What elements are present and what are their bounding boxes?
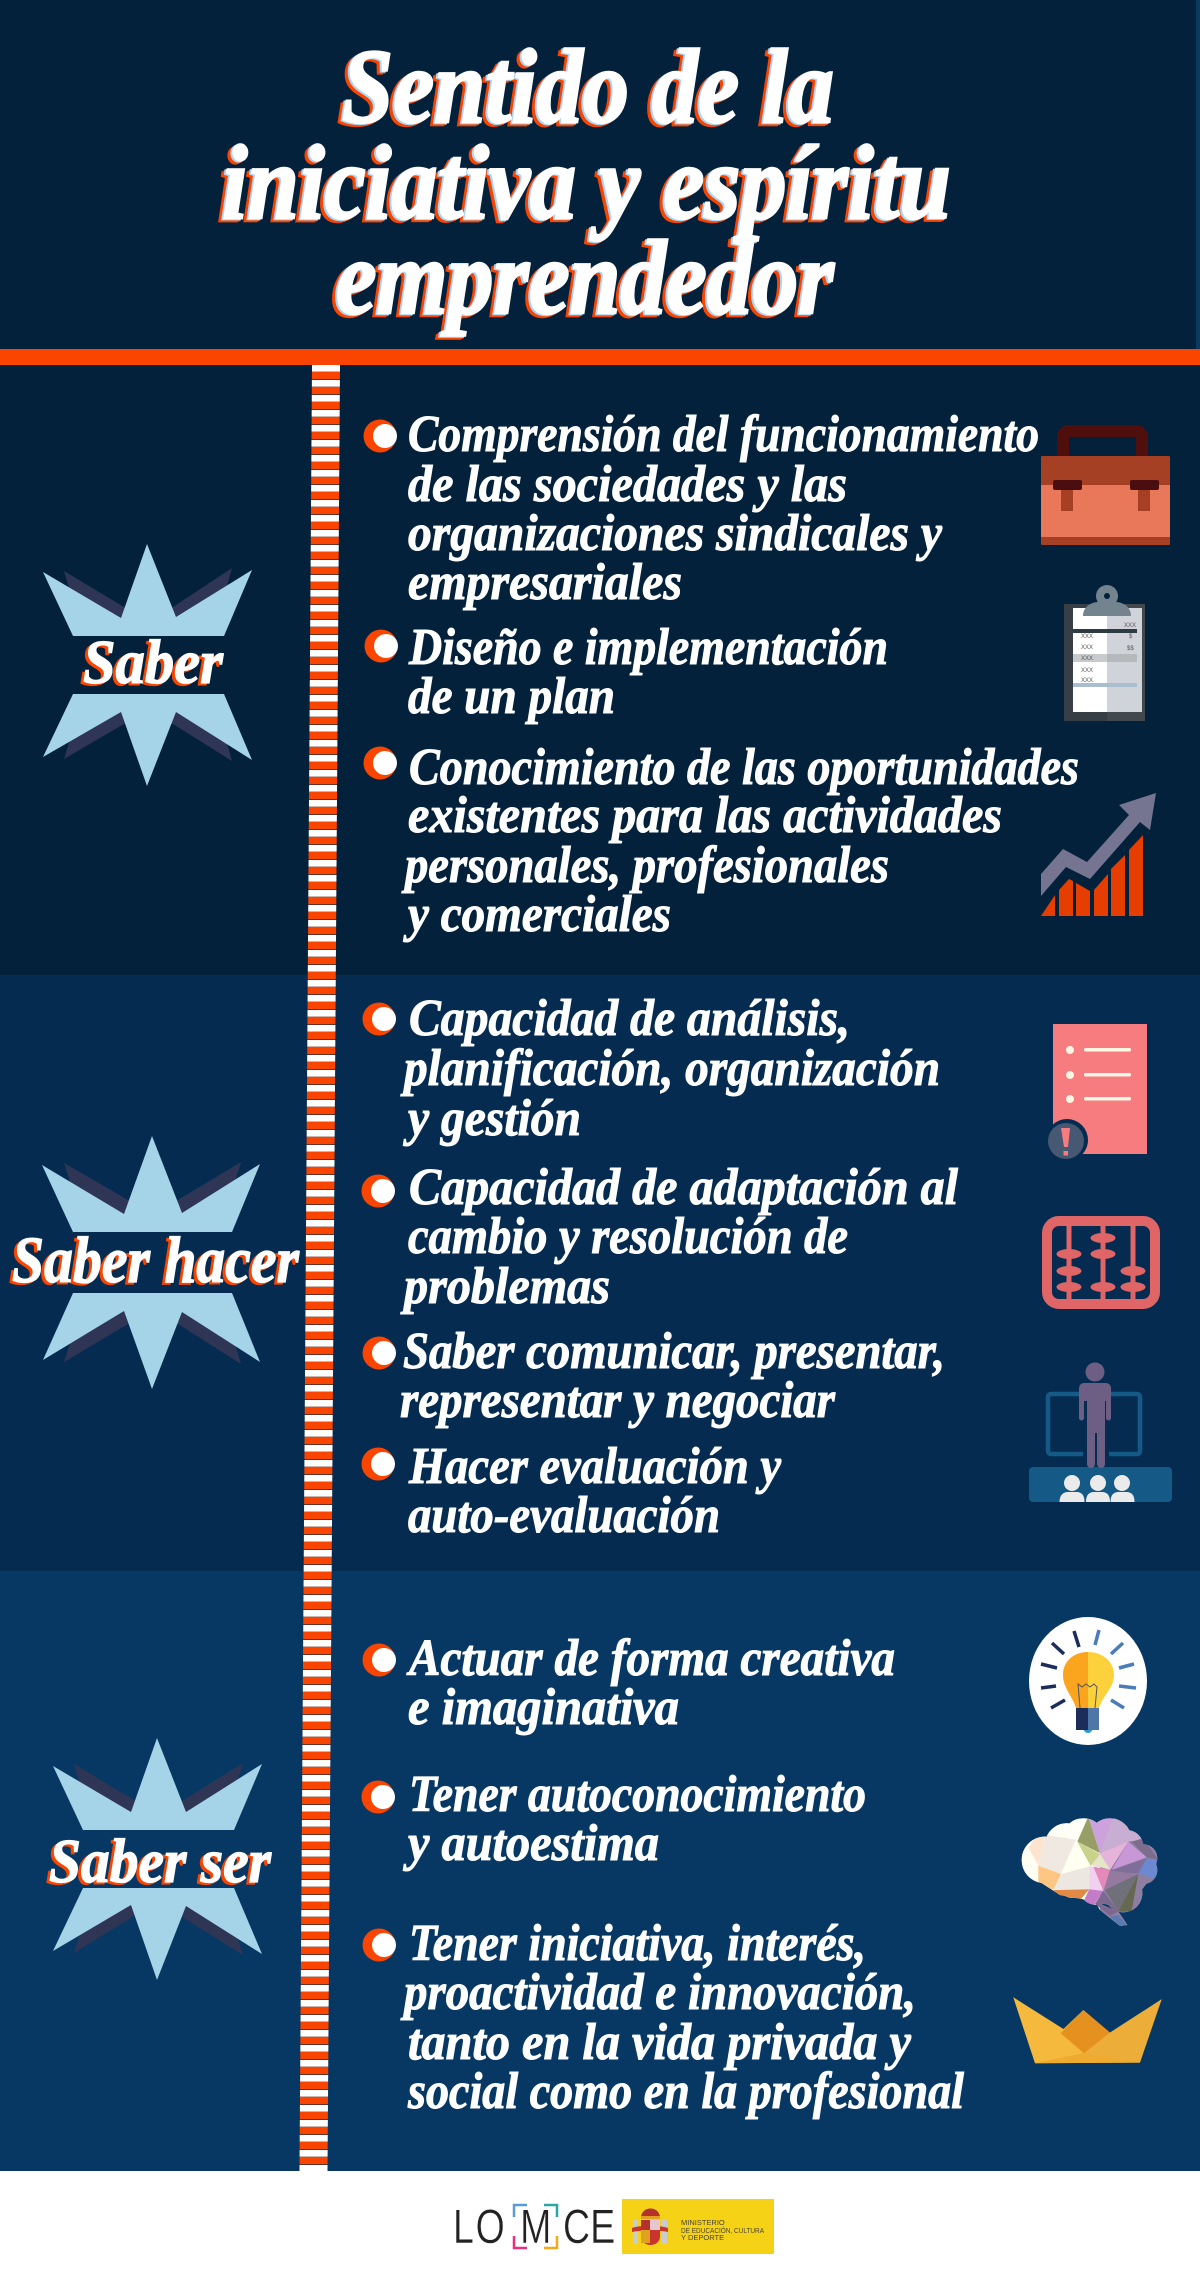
- list item: Diseño: [364, 619, 888, 725]
- list item: Comprensión: Comprensión del funcionamiento: [408, 406, 1039, 463]
- list item: Saber comunicar: representar y negociar: [400, 1372, 836, 1429]
- list item: iniciativa: tanto en la vida privada y: [408, 2014, 912, 2071]
- icon: abacus: [1047, 1221, 1155, 1304]
- title: emprendedor: [336, 219, 835, 336]
- icon: clipboard: XXX: [1124, 623, 1136, 629]
- star badge: Saber: Saber: [83, 629, 224, 697]
- footer: ministry badge: [622, 2199, 774, 2254]
- list item: Capacidad de análisis: planificación, organización: [400, 1040, 940, 1097]
- list item: Capacidad de análisis: y gestión: [403, 1090, 581, 1147]
- list item: autoconocimiento: [362, 1766, 866, 1872]
- list item: Comprensión: [364, 406, 1039, 611]
- list item: Capacidad de adaptación: [362, 1159, 959, 1315]
- icon: briefcase: [1041, 431, 1170, 545]
- icon: clipboard: $$: [1127, 646, 1134, 652]
- section background: Saber: [0, 365, 1200, 975]
- title: [222, 28, 951, 336]
- star badge: Saber hacer: Saber hacer: [12, 1224, 300, 1297]
- list item: Capacidad de adaptación: problemas: [400, 1258, 610, 1315]
- list item: Comprensión: empresariales: [408, 554, 682, 611]
- list item: iniciativa: social como en la profesional: [407, 2063, 964, 2120]
- list item: Hacer evaluación: [362, 1438, 782, 1544]
- icon: low-poly brain: [1022, 1818, 1158, 1926]
- section background: Saber ser: [0, 1571, 1200, 2171]
- orange header bar: [0, 349, 1200, 365]
- footer: ministry badge: DE EDUCACIÓN, CULTURA: [681, 2226, 764, 2235]
- icon: clipboard: XXX: [1081, 668, 1093, 674]
- star badge: Saber ser: [49, 1738, 272, 1980]
- list item: Conocimiento: y comerciales: [403, 886, 671, 943]
- list item: Actuar: Actuar de forma creativa: [406, 1630, 895, 1687]
- section background: header: [0, 0, 1200, 349]
- section background: footer: [0, 2171, 1200, 2292]
- list item: Hacer evaluación: auto-evaluación: [408, 1487, 720, 1544]
- list item: iniciativa: [362, 1915, 964, 2120]
- section background: Saber hacer: [0, 975, 1200, 1571]
- icon: clipboard: $: [1129, 634, 1133, 640]
- list item: Capacidad de adaptación: Capacidad de adaptación al: [409, 1159, 959, 1216]
- list item: Saber comunicar: Saber comunicar, presentar,: [403, 1323, 945, 1380]
- striped vertical timeline: [300, 365, 340, 2171]
- footer: ministry badge: MINISTERIO: [681, 2218, 725, 2227]
- list item: Conocimiento: Conocimiento de las oportunidades: [409, 739, 1079, 796]
- footer: LOMCE logo: LOMCE: [453, 2201, 615, 2254]
- icon: clipboard: XXX: [1081, 634, 1093, 640]
- icon: paper crown: [1013, 1997, 1162, 2063]
- list item: Diseño: de un plan: [408, 668, 615, 725]
- star badge: Saber ser: Saber ser: [49, 1828, 272, 1896]
- list item: Saber comunicar: [362, 1323, 945, 1429]
- list item: Capacidad de adaptación: cambio y resolución de: [408, 1208, 848, 1265]
- list item: autoconocimiento: Tener autoconocimiento: [409, 1766, 866, 1823]
- list item: Conocimiento: personales, profesionales: [401, 837, 889, 894]
- list item: Conocimiento: existentes para las actividades: [408, 787, 1002, 844]
- icon: presenter and audience: [1029, 1362, 1172, 1502]
- list item: Hacer evaluación: Hacer evaluación y: [408, 1438, 782, 1495]
- list item: autoconocimiento: y autoestima: [402, 1815, 659, 1872]
- list item: iniciativa: proactividad e innovación,: [400, 1964, 916, 2021]
- list item: Comprensión: de las sociedades y las: [408, 456, 847, 513]
- list item: Actuar: e imaginativa: [408, 1679, 679, 1736]
- list item: Conocimiento: [364, 739, 1079, 943]
- footer: ministry badge: Y DEPORTE: [681, 2233, 724, 2242]
- icon: clipboard: XXX: [1081, 656, 1093, 662]
- list item: Diseño: Diseño e implementación: [408, 619, 888, 676]
- icon: clipboard: XXX: [1081, 645, 1093, 651]
- star badge: Saber: [43, 544, 252, 786]
- icon: clipboard: XXX: [1081, 678, 1093, 684]
- icon: checklist document: [1046, 1024, 1147, 1161]
- title: Sentido de la: [342, 28, 834, 145]
- icon: light bulb: [1029, 1617, 1147, 1745]
- list item: iniciativa: Tener iniciativa, interés,: [409, 1915, 866, 1972]
- icon: clipboard: [1064, 585, 1145, 721]
- icon: growth chart: [1041, 793, 1156, 916]
- star badge: Saber hacer: [12, 1136, 300, 1389]
- list item: Comprensión: organizaciones sindicales y: [408, 505, 943, 562]
- list item: Actuar: [362, 1630, 895, 1736]
- list item: Capacidad de análisis: Capacidad de análisis,: [409, 990, 850, 1047]
- list item: Capacidad de análisis: [362, 990, 940, 1147]
- title: iniciativa y espíritu: [222, 124, 951, 241]
